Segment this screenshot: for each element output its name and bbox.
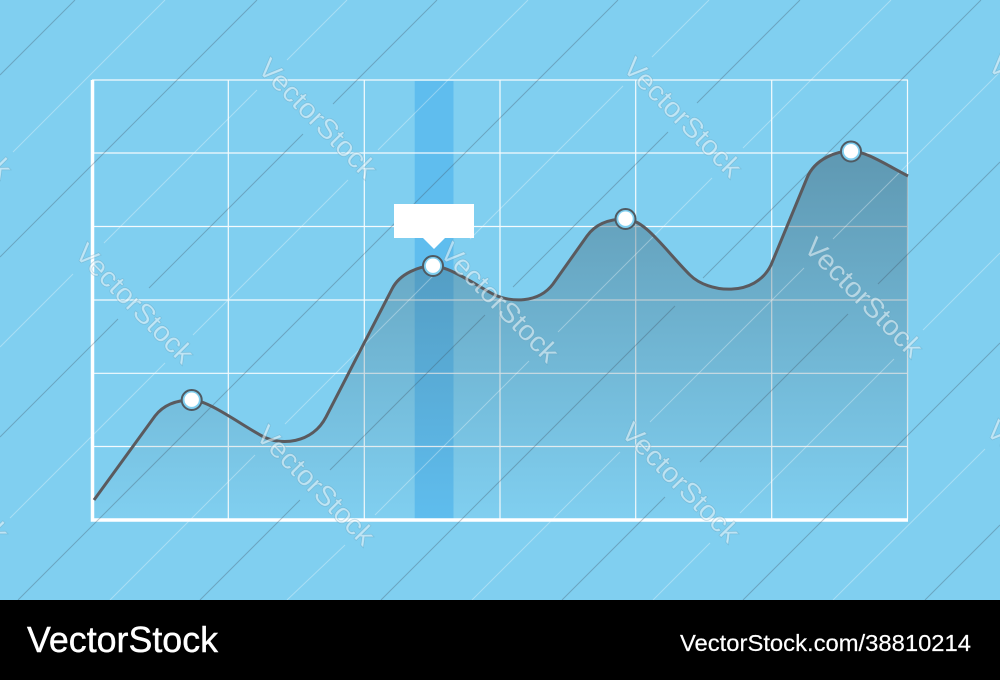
watermarks: VectorStock — [617, 51, 749, 184]
watermarks: VectorStock — [252, 52, 384, 185]
watermarks: VectorStock — [615, 416, 747, 549]
watermarks: VectorStock — [798, 231, 930, 364]
watermarks: VectorStock — [250, 419, 382, 552]
data point 1 — [182, 390, 202, 410]
axes — [92, 80, 908, 520]
footer band — [0, 600, 1000, 680]
highlighted column band — [415, 81, 454, 519]
line series — [94, 151, 908, 500]
footer image id: VectorStock.com/38810214 — [680, 630, 971, 656]
callout — [394, 204, 474, 249]
watermarks — [0, 49, 1000, 552]
footer brand: VectorStock — [27, 619, 219, 660]
data point 4 — [841, 142, 861, 162]
chart grid — [92, 80, 908, 519]
data point 3 — [616, 209, 636, 229]
watermarks: VectorStock — [69, 237, 201, 370]
data point 2 — [423, 256, 443, 276]
area under the line — [94, 151, 908, 519]
watermarks: VectorStock — [434, 236, 566, 369]
